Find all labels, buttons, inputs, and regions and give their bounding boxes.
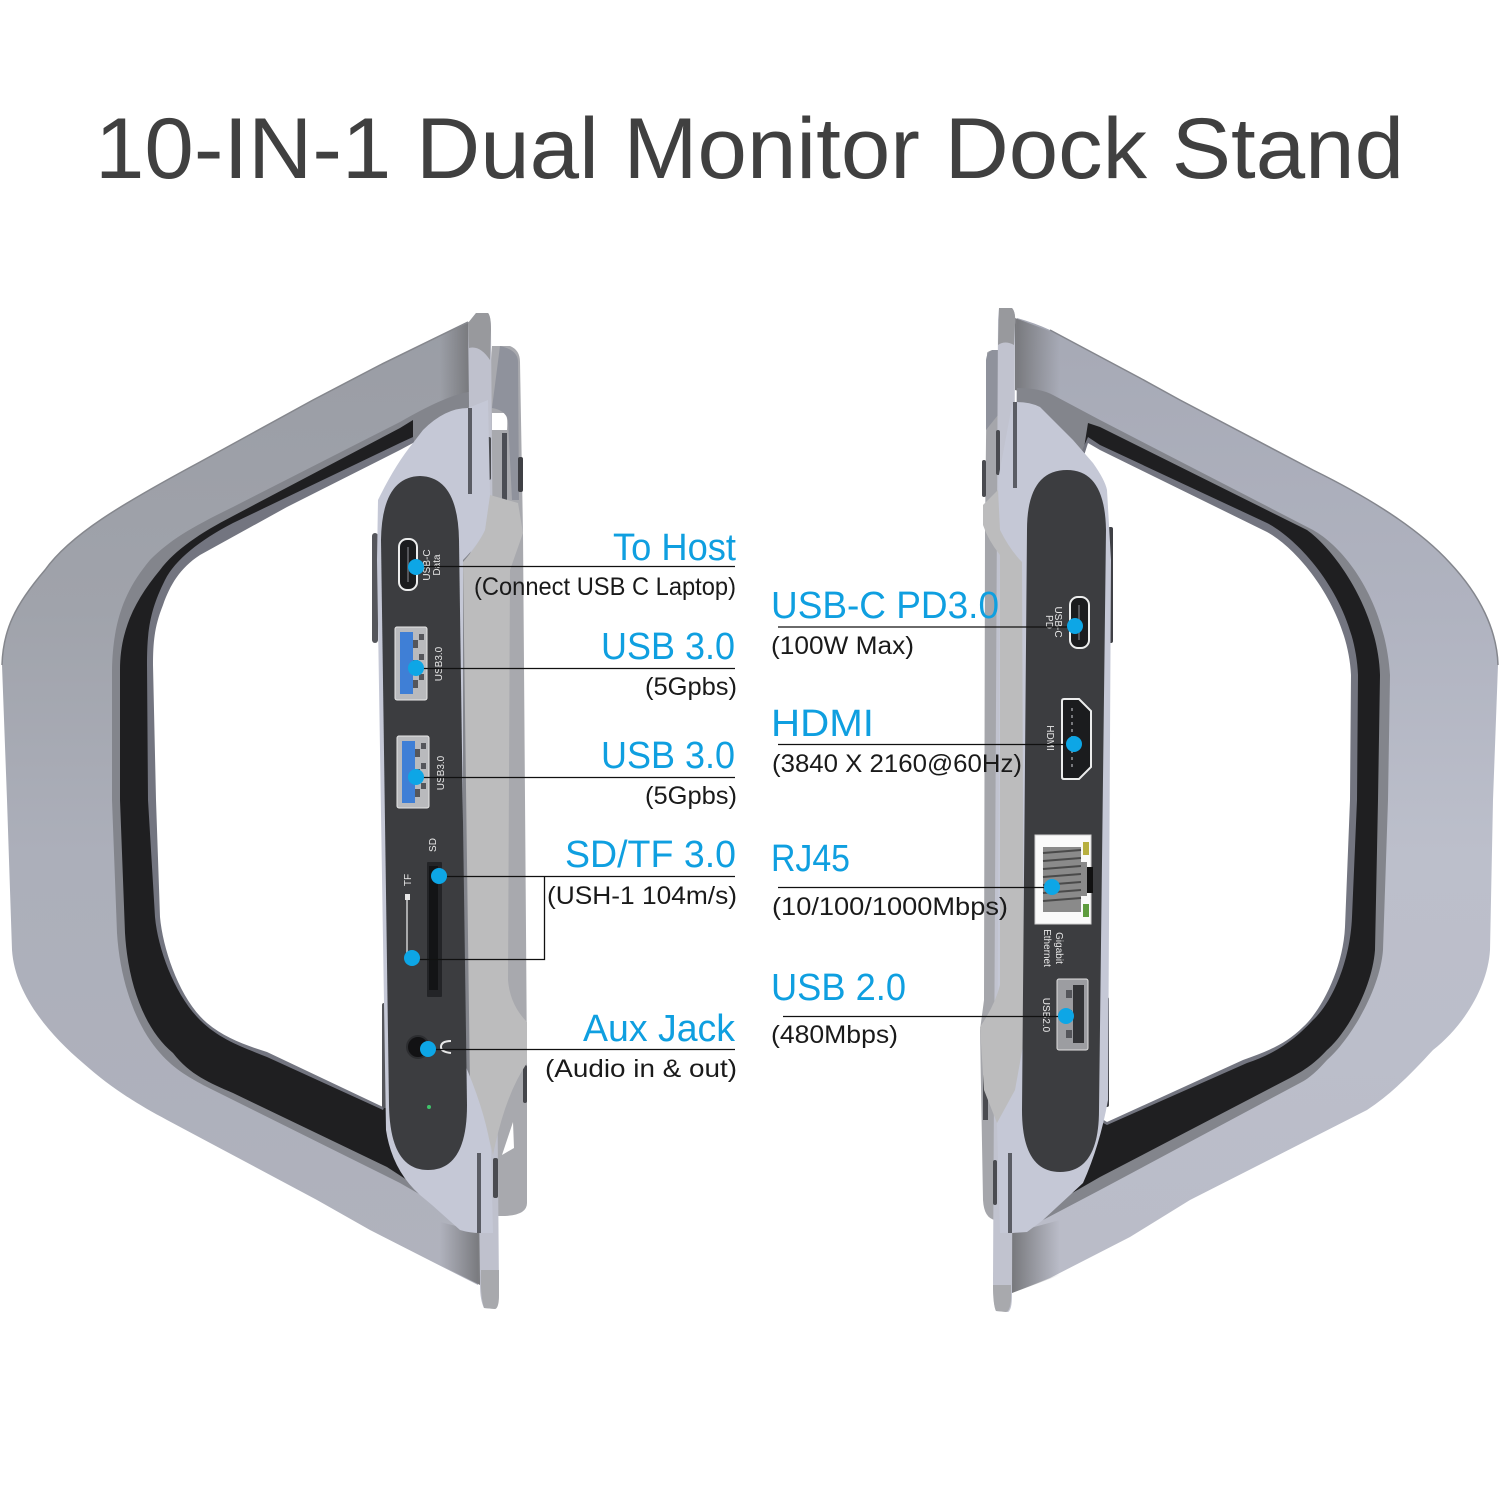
mount plate <box>468 313 499 1309</box>
callout: SD/TF 3.0 <box>404 834 737 966</box>
callout: HDMI: HDMI <box>771 703 874 745</box>
port: USB 3.0 top: USB3.0 <box>434 646 445 681</box>
stand frame <box>1012 318 1498 1293</box>
port: USB-C PD <box>1043 597 1089 648</box>
white opening <box>153 443 430 1107</box>
callout: To Host: (Connect USB C Laptop) <box>474 573 736 601</box>
indicator LED <box>427 1105 431 1109</box>
frame rim <box>1012 388 1390 1233</box>
port: USB 2.0: USB2.0 <box>1040 998 1051 1033</box>
shaded frame ends near the plate <box>1015 318 1060 400</box>
back clip <box>980 350 1005 1220</box>
callout: USB-C PD3.0: (100W Max) <box>771 632 914 660</box>
callout: To Host <box>408 527 736 601</box>
callout: HDMI: (3840 X 2160@60Hz) <box>772 750 1022 778</box>
callout: USB 3.0 bottom: USB 3.0 <box>601 735 735 777</box>
callout: USB-C PD3.0: USB-C PD3.0 <box>771 585 999 627</box>
port: USB-C PD: USB-C <box>1052 606 1063 638</box>
port: USB-C PD: PD <box>1043 615 1054 629</box>
callout: SD/TF 3.0: (USH-1 104m/s) <box>547 882 737 910</box>
callout: USB 3.0 bottom: (5Gpbs) <box>645 782 737 810</box>
port: USB-C data: Data <box>432 554 443 576</box>
right dock stand <box>980 308 1498 1312</box>
callout: USB-C PD3.0 <box>771 585 1083 660</box>
callout: HDMI <box>771 703 1082 778</box>
dark port panel <box>1022 470 1106 1172</box>
stand frame <box>2 320 480 1285</box>
callout: USB 3.0 top: USB 3.0 <box>601 626 735 668</box>
port: USB 3.0 bottom: USB3.0 <box>436 755 447 790</box>
side column <box>980 490 1024 1123</box>
port: TF slot <box>403 874 414 961</box>
callout: RJ45 <box>771 838 1060 921</box>
shaded frame ends near the plate <box>440 322 470 400</box>
callout: RJ45: RJ45 <box>771 838 850 880</box>
callout: USB 2.0: USB 2.0 <box>771 967 906 1009</box>
port: HDMI: HDMI <box>1044 725 1055 751</box>
callout: SD/TF 3.0: SD/TF 3.0 <box>565 834 736 876</box>
port: USB 3.0 bottom <box>397 736 447 808</box>
side bumps <box>1108 527 1113 643</box>
port: USB-C data: USB-C <box>422 549 433 581</box>
mount plate <box>993 308 1015 1312</box>
body plate <box>377 400 493 1233</box>
callout: Aux Jack <box>420 1008 737 1083</box>
port: HDMI <box>1044 699 1091 779</box>
callout: RJ45: (10/100/1000Mbps) <box>772 893 1008 921</box>
port: USB 3.0 top <box>395 627 445 700</box>
callout: USB 2.0: (480Mbps) <box>771 1021 898 1049</box>
callout: USB 3.0 top: (5Gpbs) <box>645 673 737 701</box>
frame rim <box>112 392 470 1220</box>
port: TF slot: TF <box>403 874 414 886</box>
rubber inner band <box>1060 423 1380 1200</box>
port: aux jack <box>407 1036 451 1058</box>
callout: USB 2.0 <box>771 967 1074 1049</box>
port: USB 2.0 <box>1040 979 1088 1050</box>
port: RJ45: Gigabit <box>1053 932 1064 964</box>
callout: To Host: To Host <box>613 527 736 569</box>
dark port panel <box>381 476 467 1170</box>
white opening <box>1070 443 1351 1122</box>
body plate <box>997 402 1111 1233</box>
port: USB-C data <box>399 539 443 590</box>
callout: Aux Jack: Aux Jack <box>583 1008 736 1050</box>
port: SD slot <box>427 838 442 997</box>
port: SD slot: SD <box>428 838 439 852</box>
band lip <box>1060 437 1358 1125</box>
port: RJ45 <box>1035 835 1093 967</box>
rubber inner band <box>120 420 430 1195</box>
callout: Aux Jack: (Audio in & out) <box>545 1055 737 1083</box>
port: RJ45: Ethernet <box>1041 929 1052 967</box>
title: 10-IN-1 Dual Monitor Dock Stand <box>95 101 1404 197</box>
side bumps <box>372 533 378 643</box>
back clip <box>488 346 527 1216</box>
side column <box>463 495 527 1155</box>
left dock stand <box>2 313 527 1309</box>
callout: USB 3.0 top <box>408 626 737 701</box>
band lip <box>147 437 430 1110</box>
callout: USB 3.0 bottom <box>408 735 737 810</box>
